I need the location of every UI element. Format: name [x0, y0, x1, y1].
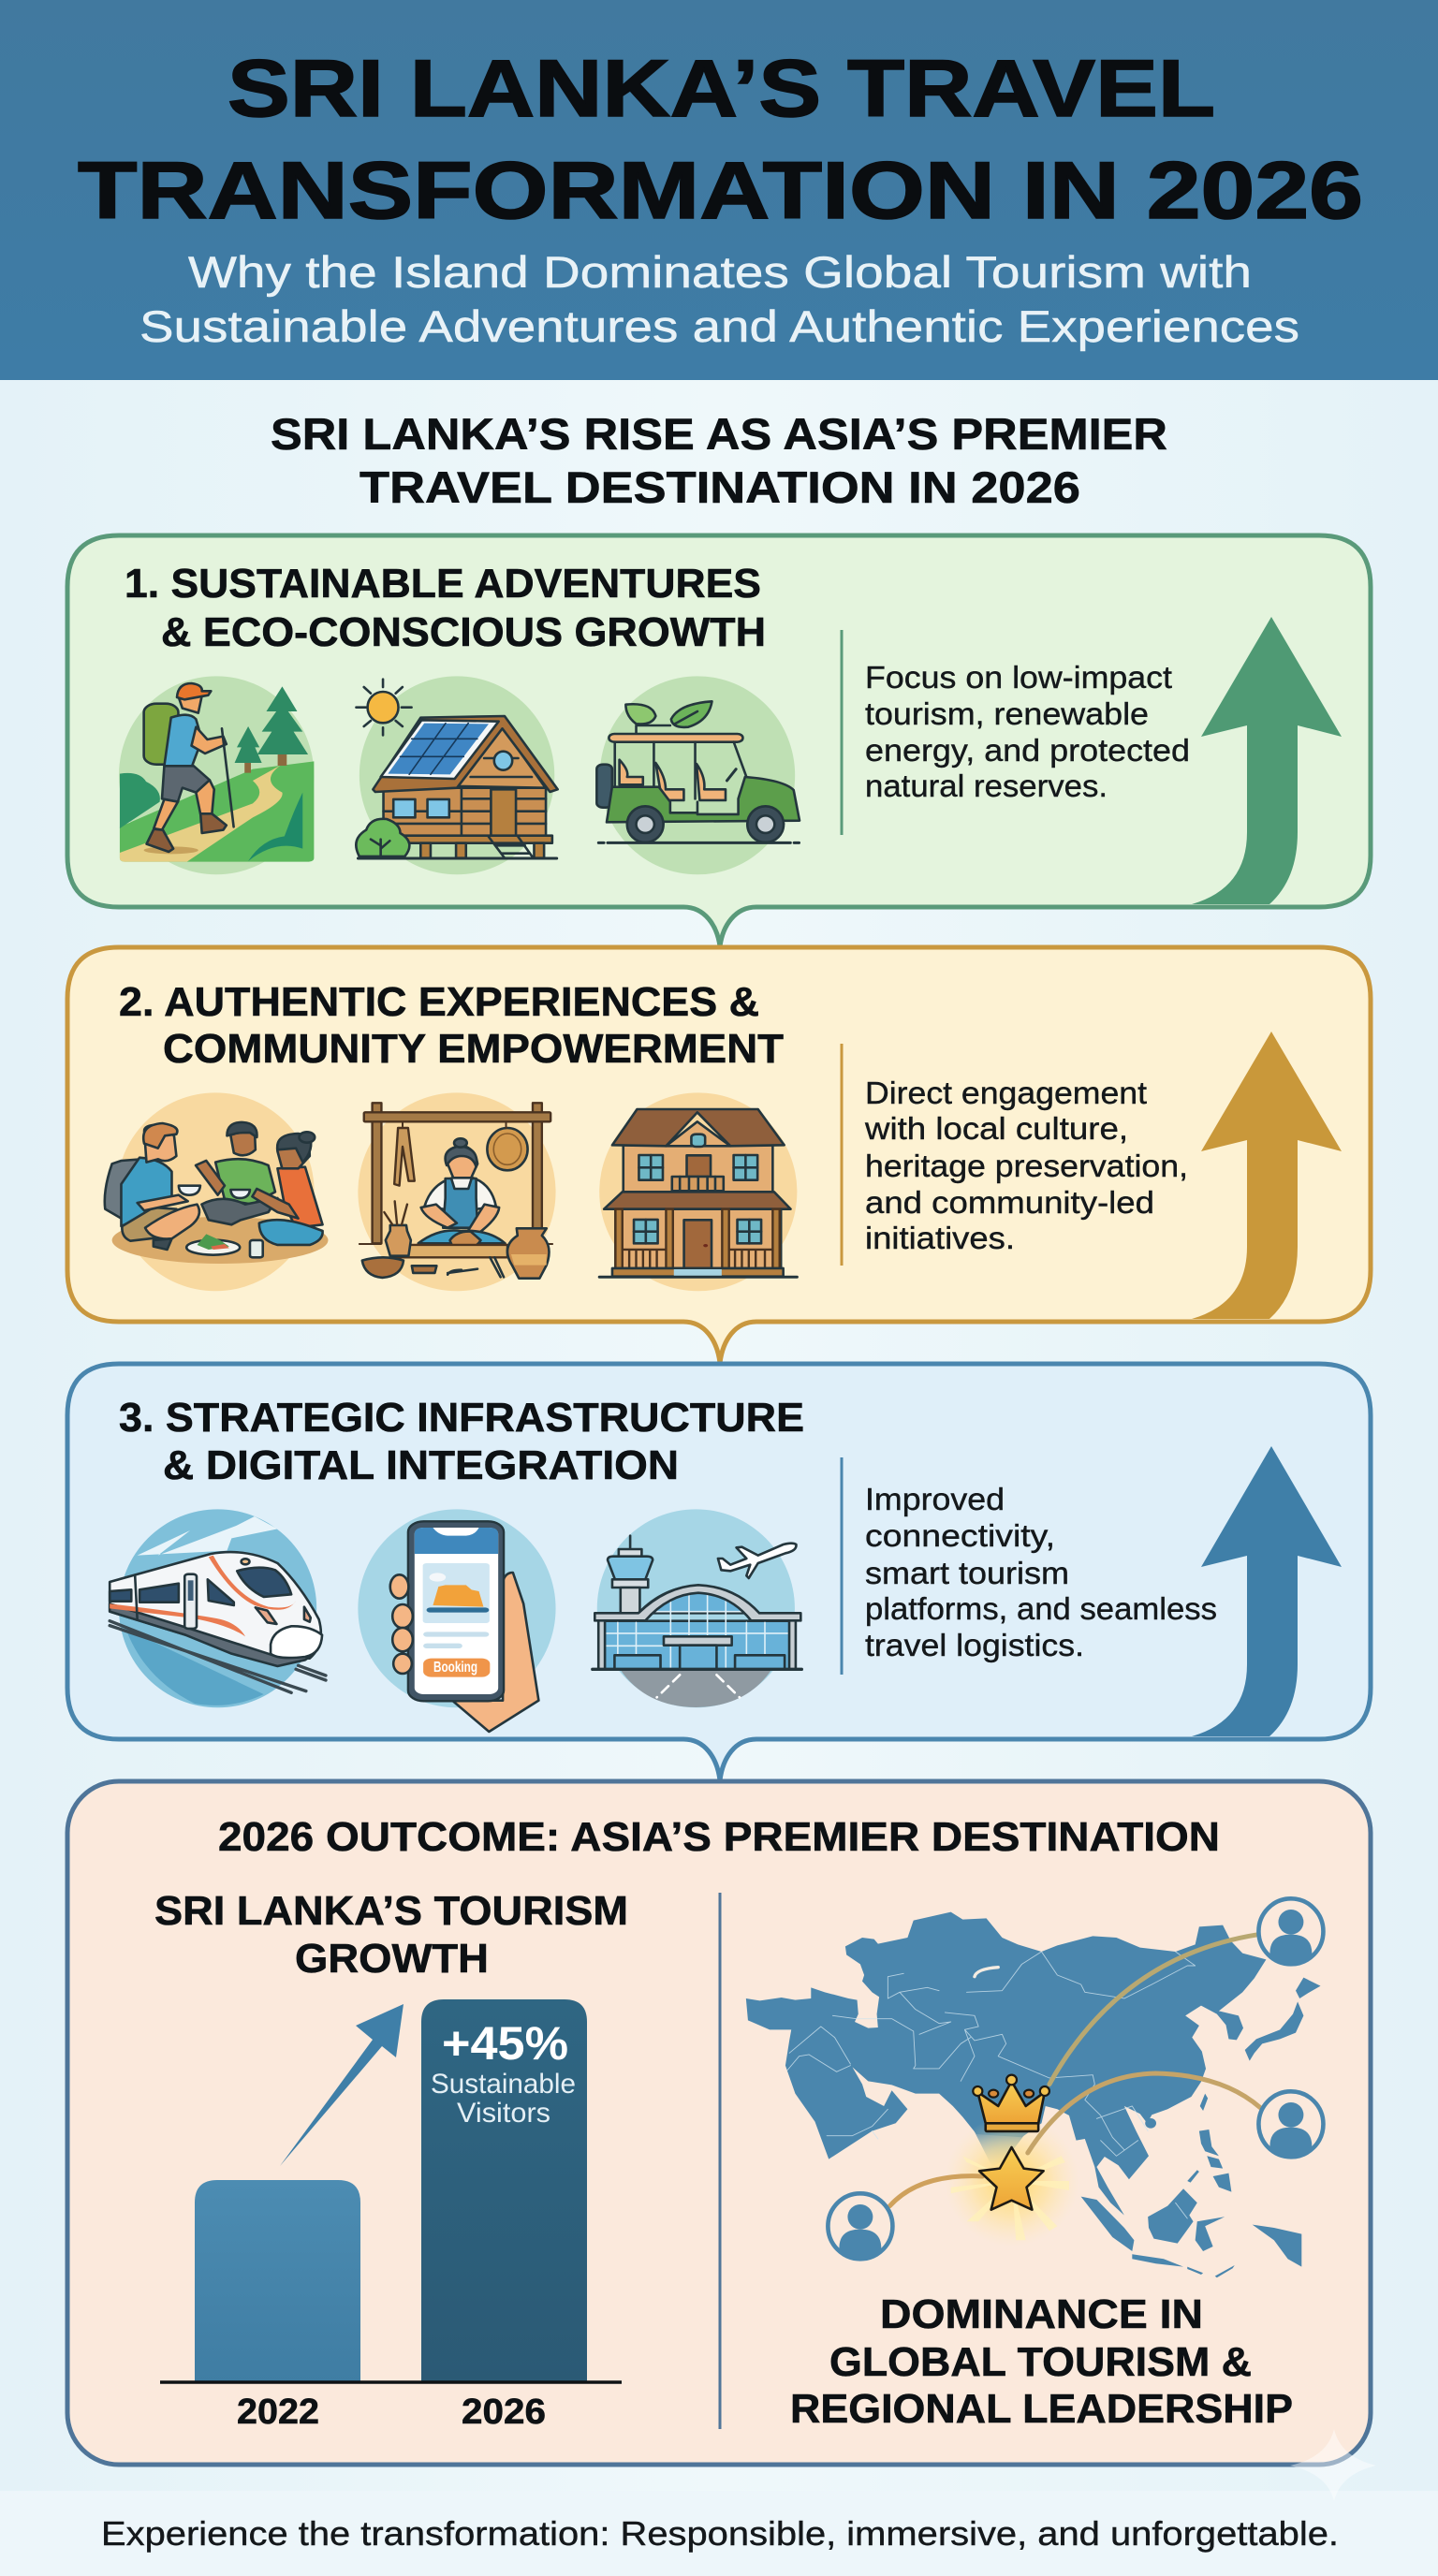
divider and description 2: initiatives. — [865, 1221, 1015, 1255]
arrow: green growth — [1192, 617, 1342, 904]
icon: star — [979, 2147, 1044, 2210]
bar 2026 — [421, 1999, 587, 2382]
chart heading: SRI LANKA’S TOURISM — [154, 1888, 628, 1934]
bar 2026: Sustainable — [431, 2069, 576, 2100]
heading 3: 3. STRATEGIC INFRASTRUCTURE — [119, 1395, 804, 1441]
divider and description 2: Direct engagement — [865, 1076, 1147, 1110]
axis labels: 2022 — [237, 2393, 319, 2432]
divider and description 3: Improved — [865, 1482, 1005, 1516]
heading 1 — [125, 561, 766, 655]
divider and description 1 — [842, 630, 1190, 835]
section heading — [271, 409, 1167, 512]
divider and description 1: Focus on low-impact — [865, 660, 1172, 695]
icon: artisan workshop — [358, 1092, 556, 1291]
icon: crown — [973, 2075, 1049, 2131]
heading 1: 1. SUSTAINABLE ADVENTURES — [125, 561, 761, 607]
icon: phone booking — [358, 1509, 556, 1732]
title: SRI LANKA’S TRAVEL — [227, 44, 1215, 134]
icon: hiker — [119, 676, 314, 874]
icon: solar cabin — [356, 676, 558, 874]
heading 3 — [119, 1395, 804, 1488]
divider and description 2 — [842, 1044, 1188, 1266]
dominance caption: DOMINANCE IN — [880, 2291, 1203, 2337]
subtitle: Sustainable Adventures and Authentic Experiences — [139, 301, 1299, 351]
panel: 2026 outcome — [67, 1781, 1371, 2465]
divider and description 2: heritage preservation, — [865, 1149, 1188, 1183]
section heading: SRI LANKA’S RISE AS ASIA’S PREMIER — [271, 409, 1167, 459]
icon: eco jeep — [596, 676, 800, 874]
divider and description 1: energy, and protected — [865, 733, 1190, 768]
chart axis — [160, 2380, 622, 2384]
divider and description 3: platforms, and seamless — [865, 1591, 1217, 1626]
footer tagline: Experience the transformation: Responsible, immersive, and unforgettable. — [101, 2514, 1339, 2553]
icon: airport terminal — [593, 1509, 801, 1707]
divider and description 3: travel logistics. — [865, 1628, 1084, 1662]
growth chart — [154, 1888, 628, 2432]
divider and description 1: tourism, renewable — [865, 696, 1149, 731]
title: TRANSFORMATION IN 2026 — [78, 146, 1363, 236]
heading 2 — [119, 979, 784, 1072]
booking button label: Booking — [433, 1660, 477, 1676]
outcome heading: 2026 OUTCOME: ASIA’S PREMIER DESTINATION — [218, 1814, 1220, 1860]
chart heading: GROWTH — [295, 1936, 489, 1982]
dominance caption: GLOBAL TOURISM & — [829, 2339, 1252, 2385]
divider and description 3: smart tourism — [865, 1556, 1069, 1590]
bar 2022 — [195, 2180, 360, 2382]
divider and description 3 — [842, 1457, 1217, 1675]
vertical divider — [719, 1893, 721, 2429]
heading 2: 2. AUTHENTIC EXPERIENCES & — [119, 979, 759, 1025]
title — [78, 44, 1363, 236]
panel: sustainable adventures — [67, 535, 1371, 946]
map: Asia with connections — [746, 1898, 1323, 2277]
bar 2026: Visitors — [457, 2098, 550, 2129]
icon: high-speed train — [110, 1509, 326, 1707]
divider and description 2: and community-led — [865, 1185, 1154, 1220]
panel: strategic infrastructure — [67, 1364, 1371, 1780]
bar 2026: +45% — [442, 2017, 568, 2070]
section heading: TRAVEL DESTINATION IN 2026 — [360, 462, 1080, 512]
heading 1: & ECO-CONSCIOUS GROWTH — [161, 609, 766, 655]
icon: homestay house — [599, 1092, 797, 1291]
subtitle — [139, 247, 1299, 351]
divider and description 3: connectivity, — [865, 1518, 1055, 1553]
subtitle: Why the Island Dominates Global Tourism with — [188, 247, 1252, 297]
divider and description 2: with local culture, — [864, 1111, 1128, 1146]
dominance caption — [790, 2291, 1293, 2432]
axis labels — [237, 2393, 546, 2432]
dominance caption: REGIONAL LEADERSHIP — [790, 2386, 1293, 2432]
header banner — [0, 0, 1438, 380]
heading 2: COMMUNITY EMPOWERMENT — [163, 1026, 784, 1072]
arrow: gold growth — [1192, 1032, 1342, 1319]
watermark sparkle — [1290, 2429, 1376, 2501]
growth arrow — [280, 2004, 404, 2166]
heading 3: & DIGITAL INTEGRATION — [163, 1442, 679, 1488]
footer band — [0, 2491, 1438, 2576]
arrow: blue growth — [1192, 1446, 1342, 1736]
icon: shared meal — [105, 1092, 328, 1291]
divider and description 1: natural reserves. — [865, 768, 1108, 803]
panel: authentic experiences — [67, 947, 1371, 1363]
axis labels: 2026 — [462, 2393, 546, 2432]
chart heading — [154, 1888, 628, 1982]
